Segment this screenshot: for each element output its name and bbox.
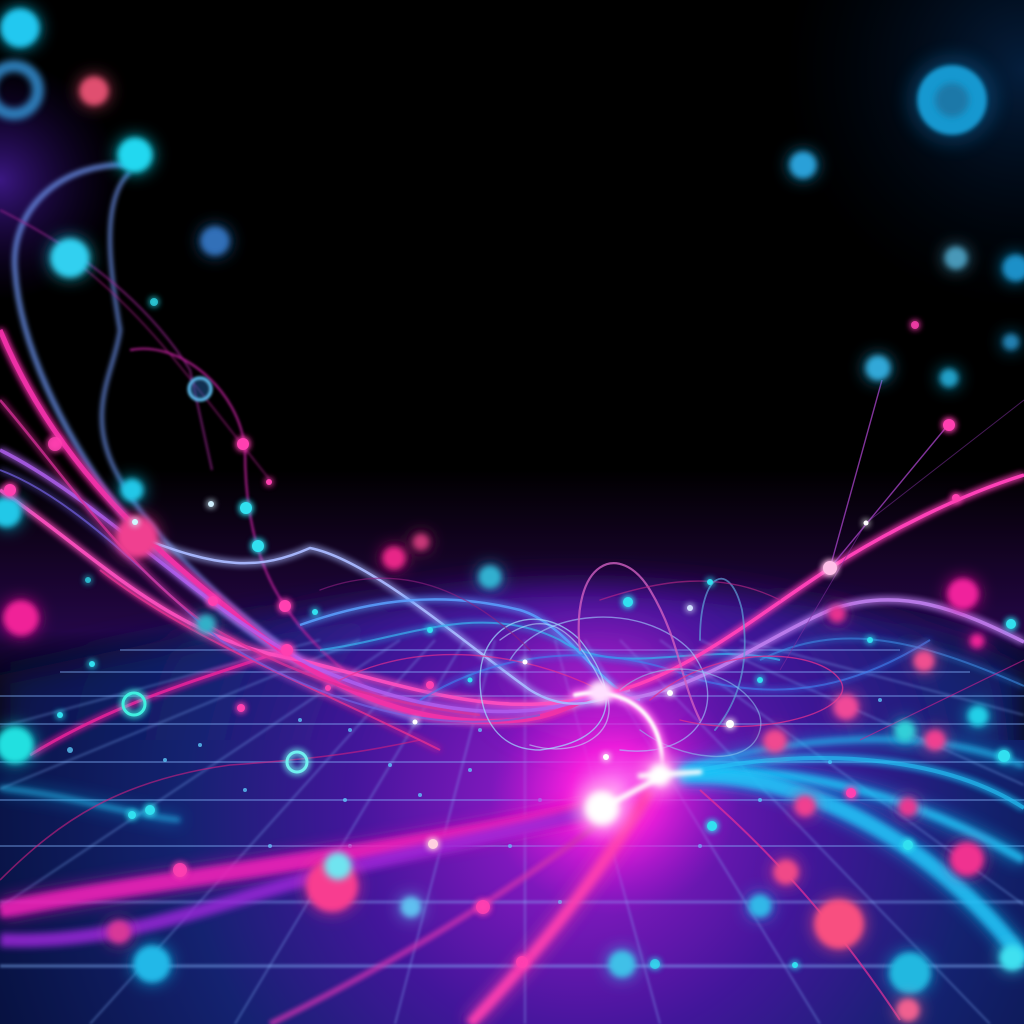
left strands: sweep from upper left to the centre [15,165,420,720]
cyan highlight on the large pink node [324,852,352,880]
bright central arcs and light burst [575,680,700,834]
blue strands: lower right [0,739,1024,960]
right strands [600,380,1024,740]
large halo node: top right [906,54,998,146]
floor sparkle dots [67,698,882,904]
ring nodes [123,378,307,772]
grid floor [0,586,1024,1024]
soft ring: top left [0,66,38,114]
small sharp nodes [4,298,1016,969]
central glow [490,640,740,915]
magenta beams [0,650,900,1024]
grid horizontal lines [0,650,1024,966]
blue wave strands [300,599,1024,700]
grid radial lines [0,640,1024,1024]
knot of fine loops [320,563,843,756]
